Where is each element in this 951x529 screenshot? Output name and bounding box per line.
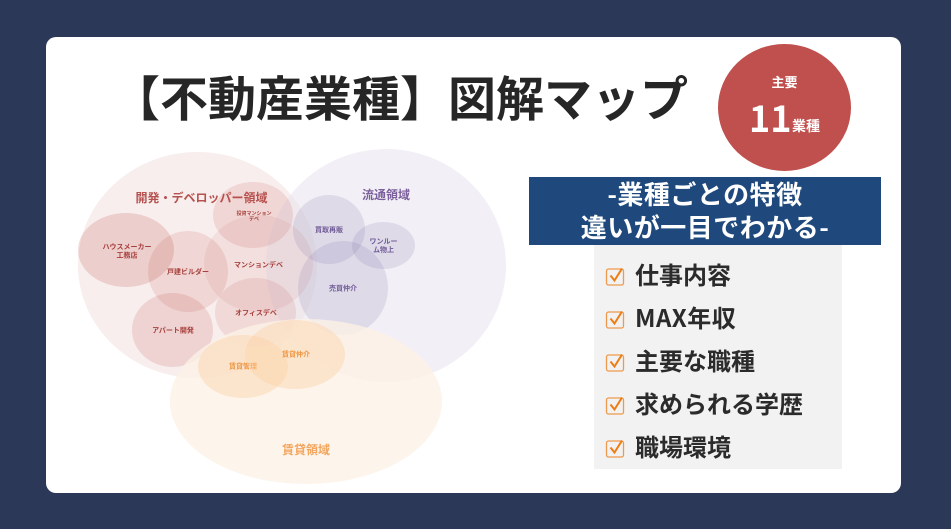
bubble: home builder: 戸建ビルダー (167, 267, 209, 277)
region: development (78, 152, 317, 378)
region: rental (170, 319, 442, 484)
banner (529, 177, 881, 245)
bubble: house maker: ハウスメーカー (102, 242, 152, 252)
badge: 11 major business types (718, 44, 851, 171)
bubble: rental brokerage (245, 320, 345, 389)
region: distribution (266, 149, 506, 382)
region: rental: 賃貸領域 (282, 441, 330, 458)
item: max salary: MAX年収 (635, 299, 736, 334)
bubble: sales brokerage: 売買仲介 (329, 284, 357, 294)
bubble: rental management (198, 335, 288, 398)
bubble: house maker (78, 213, 174, 287)
bubble: office developer: オフィスデベ (235, 308, 277, 318)
bubble: sales brokerage (298, 241, 388, 335)
bubble: one-room sales: ム物上 (373, 245, 394, 255)
bubble: rental brokerage: 賃貸仲介 (282, 350, 310, 360)
bubble: investment mansion developer (213, 182, 293, 248)
bubble: office developer (215, 278, 296, 347)
bubble: buy and resell: 買取再販 (315, 225, 343, 235)
bubble: buy and resell (293, 195, 365, 264)
bubble: rental management: 賃貸管理 (229, 362, 257, 372)
region: development: 開発・デベロッパー領域 (135, 189, 268, 206)
panel: white card (46, 37, 901, 493)
bubble: apartment development (132, 293, 213, 367)
item: required education: 求められる学歴 (635, 385, 803, 420)
badge: 11 major business types: 主要 (771, 72, 798, 91)
bubble: one-room sales: ワンルー (370, 236, 398, 246)
banner: -業種ごとの特徴 (607, 175, 803, 212)
bubble: apartment development: アパート開発 (152, 326, 194, 336)
bubble: home builder (148, 231, 228, 312)
panel: checklist (594, 245, 842, 469)
bubble: investment mansion developer: デベ (249, 216, 259, 222)
badge: 11 major business types: 業種 (792, 116, 820, 136)
bubble: investment mansion developer: 投資マンション (236, 210, 272, 217)
banner: 違いが一目でわかる- (581, 208, 829, 245)
bubble: one-room sales (352, 222, 415, 269)
item: job description: 仕事内容 (635, 256, 731, 291)
badge: 11 major business types: 11 (749, 91, 791, 143)
bubble: mansion developer (204, 215, 313, 312)
title: 【不動産業種】図解マップ (112, 60, 688, 130)
item: work environment: 職場環境 (635, 428, 731, 463)
bubble: mansion developer: マンションデベ (234, 260, 283, 270)
item: main occupations: 主要な職種 (635, 342, 755, 377)
region: distribution: 流通領域 (362, 186, 410, 203)
bubble: house maker: 工務店 (116, 250, 138, 260)
